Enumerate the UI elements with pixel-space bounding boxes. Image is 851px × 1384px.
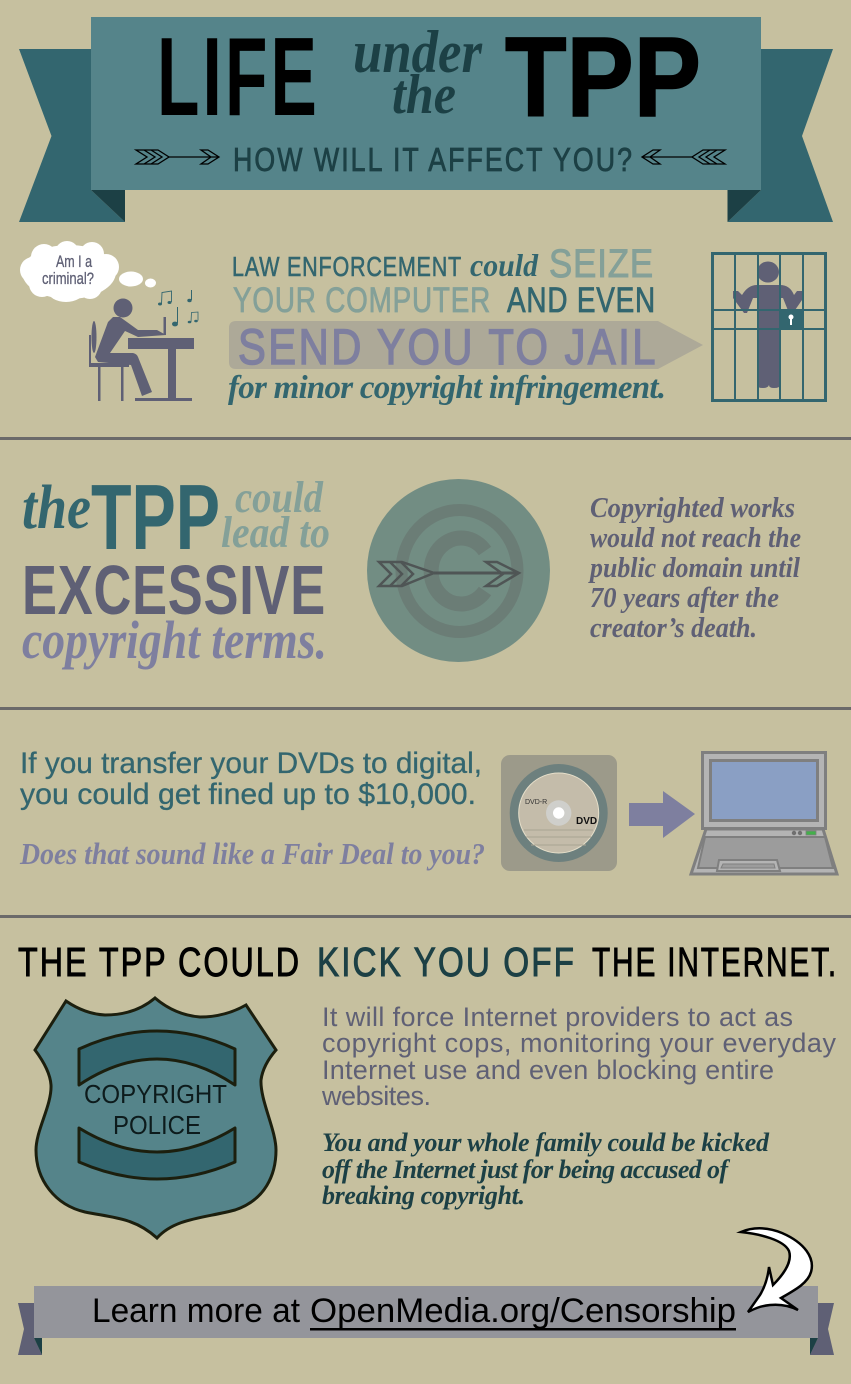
word TPP: TPP [91,465,220,569]
heading part 1: THE TPP COULD [18,939,301,985]
word EXCESSIVE: EXCESSIVE [22,551,326,629]
arrow to laptop [629,791,695,838]
text block: family kicked off: breaking copyright. [322,1181,525,1210]
text for minor copyright infringement: for minor copyright infringement. [228,370,666,406]
footer tail left [18,1303,42,1355]
title word the: the [392,64,456,126]
footer banner [18,1228,834,1355]
icon: DVD: DVD [576,816,597,827]
text block: fine [20,747,482,811]
ribbon tail right [728,49,833,222]
heading part 2: KICK YOU OFF [317,939,576,985]
icon: left arrow [136,150,219,164]
ribbon fold left [91,190,125,222]
ribbon fold right [728,190,761,222]
panel: excessive copyright terms [22,465,801,670]
headline line 2 part 1: YOUR COMPUTER [233,281,491,320]
footer tail right [810,1303,834,1355]
icon: person at computer [89,298,194,401]
text block: fine: you could get fined up to $10,000. [20,778,476,811]
text SEND YOU TO JAIL: SEND YOU TO JAIL [238,319,658,375]
text block: copyright cops [321,1002,836,1111]
subtitle: HOW WILL IT AFFECT YOU? [233,141,634,178]
title word under: under [353,19,483,85]
icon: music notes [158,290,198,326]
title banner [19,14,833,222]
cloud text: criminal? [42,269,94,288]
title word TPP: TPP [505,14,701,140]
icon: laptop [691,752,837,874]
words copyright terms: copyright terms. [22,610,327,670]
icon: copyright police badge: POLICE [113,1110,201,1140]
text block: public domain: creator’s death. [590,612,757,644]
panel: DVD fine [19,747,837,874]
text block: family kicked off: off the Internet just for being accused of [322,1155,730,1184]
headline line 1: LAW ENFORCEMENT [232,251,462,282]
text block: copyright cops: copyright cops, monitoring your everyday [322,1028,836,1058]
footer link: OpenMedia.org/Censorship [310,1292,736,1330]
word the: the [22,474,91,542]
text block: public domain: 70 years after the [590,582,779,614]
icon: right arrow [642,150,725,164]
text block: public domain [587,492,801,644]
text block: copyright cops: websites. [321,1081,431,1111]
cloud text: Am I a [56,252,92,271]
text block: copyright cops: It will force Internet providers to act as [322,1002,793,1032]
arrow banner [229,321,703,369]
text block: copyright cops: Internet use and even blocking entire [322,1055,774,1085]
icon: DVD [501,755,617,871]
text: fair deal question: Does that sound like a Fair Deal to you? [19,836,485,871]
icon: copyright target [367,479,550,662]
footer fold right [810,1338,818,1355]
icon: copyright police badge [35,998,276,1238]
text block: public domain: Copyrighted works [590,492,795,524]
word could: could [235,473,324,522]
text block: fine: If you transfer your DVDs to digital, [20,747,482,780]
footer fold left [34,1338,42,1355]
text block: family kicked off [322,1128,770,1210]
word SEIZE: SEIZE [549,242,654,286]
title word LIFE: LIFE [157,15,320,139]
ribbon tail left [19,49,125,222]
icon: copyright police badge: COPYRIGHT [84,1079,227,1109]
headline line 2 part 2: AND EVEN [507,281,656,320]
text block: family kicked off: You and your whole family could be kicked [322,1128,770,1157]
panel: jail for infringement [20,241,827,406]
thought cloud [20,241,156,302]
footer bar [34,1286,818,1338]
panel: kicked off the internet [18,939,838,1238]
footer text: Learn more at [92,1292,301,1330]
text block: public domain: public domain until [587,552,801,584]
words lead to: lead to [221,508,330,557]
icon: curved white arrow [741,1228,812,1312]
icon: arrow through target [379,562,519,586]
icon: person in jail [711,252,827,402]
text block: public domain: would not reach the [590,522,801,554]
cloud text [42,252,94,288]
word could: could [470,247,539,283]
icon: DVD: DVD-R [525,799,547,806]
ribbon main panel [91,17,761,190]
